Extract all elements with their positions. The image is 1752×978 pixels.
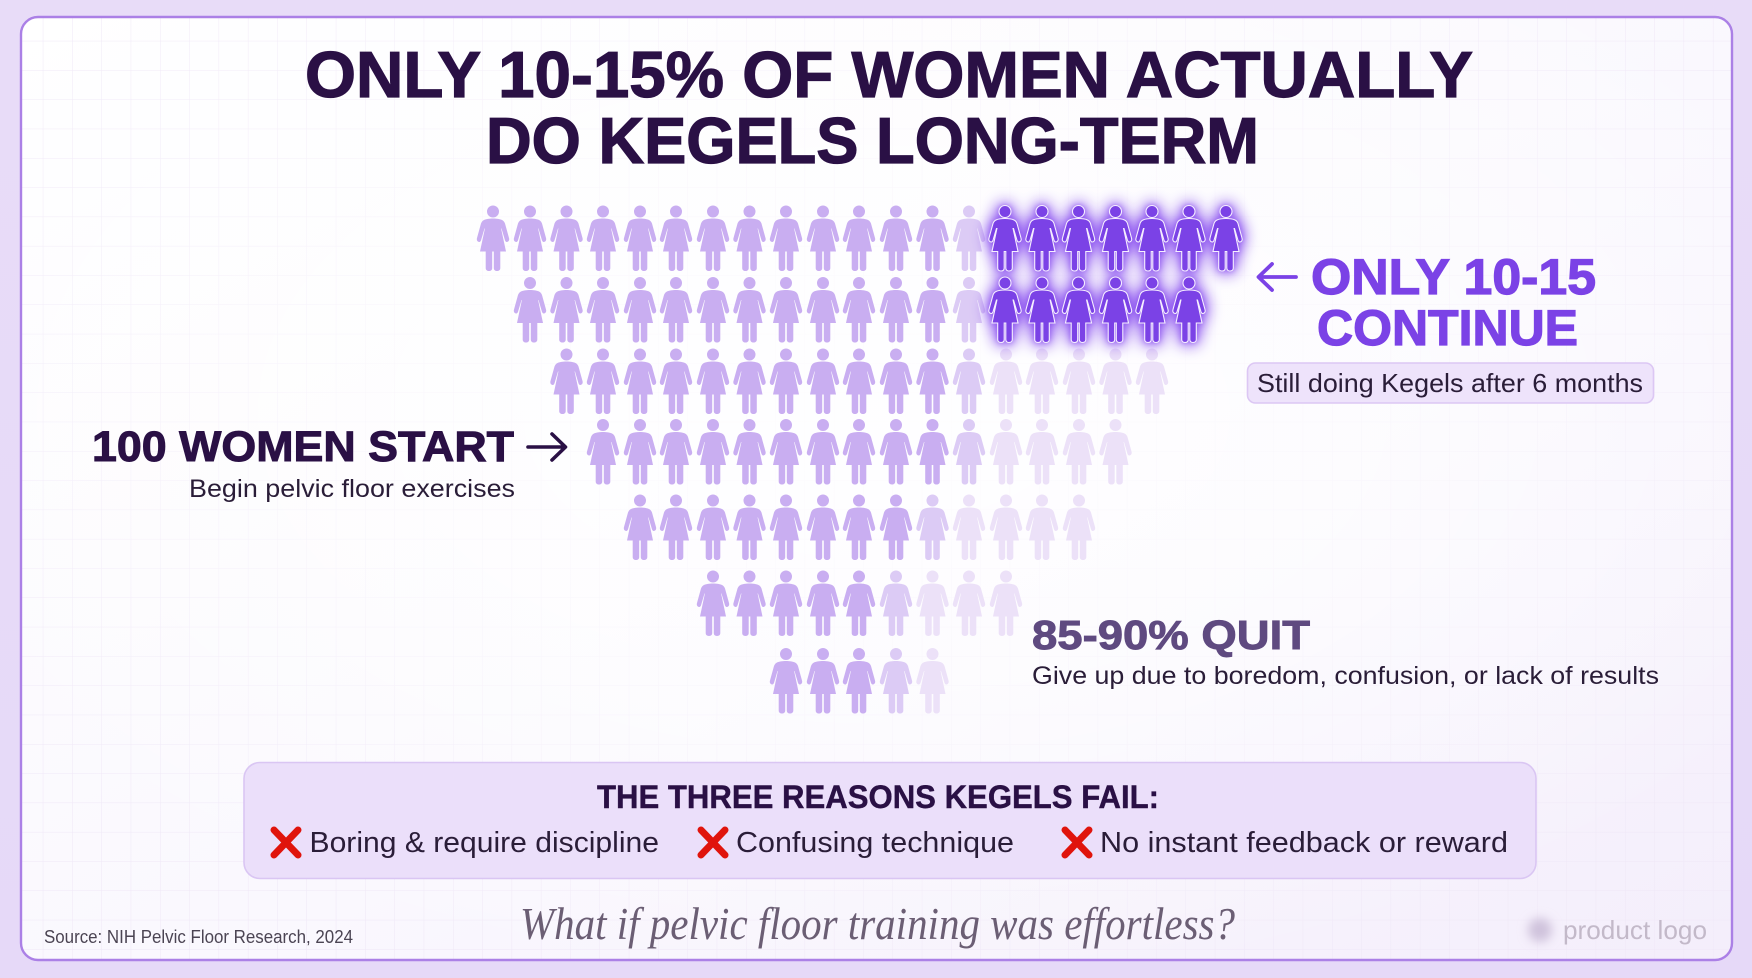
callout: only 10-15 continue bbox=[1248, 249, 1654, 403]
arrow: right toward figures bbox=[528, 434, 566, 460]
badge: after 6 months bbox=[1248, 363, 1654, 403]
callout: only 10-15 continue: ONLY 10-15 bbox=[1311, 249, 1596, 305]
panel heading: THE THREE REASONS KEGELS FAIL: bbox=[597, 779, 1159, 815]
women who quit: regular tone bbox=[477, 206, 949, 714]
icon: red cross 1 bbox=[274, 830, 298, 855]
women who quit: medium tone bbox=[880, 206, 985, 714]
callout: only 10-15 continue: CONTINUE bbox=[1317, 300, 1578, 356]
title: DO KEGELS LONG-TERM bbox=[486, 104, 1259, 177]
icon: red cross 2 bbox=[701, 830, 725, 855]
callout: 100 women start: 100 WOMEN START bbox=[92, 423, 514, 471]
panel: three reasons Kegels fail bbox=[244, 762, 1536, 878]
arrow: left toward highlighted figures bbox=[1258, 264, 1296, 290]
callout: 85-90% quit: 85-90% QUIT bbox=[1032, 612, 1310, 658]
icon: red cross 3 bbox=[1065, 830, 1089, 855]
callout: 100 women start bbox=[92, 423, 566, 503]
source note: Source: NIH Pelvic Floor Research, 2024 bbox=[44, 927, 353, 947]
callout: 85-90% quit bbox=[1032, 612, 1659, 690]
title bbox=[305, 38, 1473, 177]
reason 1: Boring & require discipline bbox=[310, 827, 659, 859]
tagline: What if pelvic floor training was effortless? bbox=[520, 899, 1235, 949]
women who continue: glowing highlighted figures bbox=[989, 206, 1242, 342]
callout: 100 women start: Begin pelvic floor exercises bbox=[189, 475, 515, 503]
women who quit: faded tone bbox=[916, 348, 1168, 714]
badge: after 6 months: Still doing Kegels after 6 months bbox=[1257, 368, 1643, 398]
reason 2: Confusing technique bbox=[736, 827, 1014, 859]
title: ONLY 10-15% OF WOMEN ACTUALLY bbox=[305, 38, 1473, 111]
product logo placeholder: product logo bbox=[1563, 915, 1707, 945]
pictogram: 100 women funnel bbox=[477, 206, 1242, 714]
reason 3: No instant feedback or reward bbox=[1100, 827, 1508, 859]
callout: 85-90% quit: Give up due to boredom, confusion, or lack of results bbox=[1032, 662, 1659, 690]
